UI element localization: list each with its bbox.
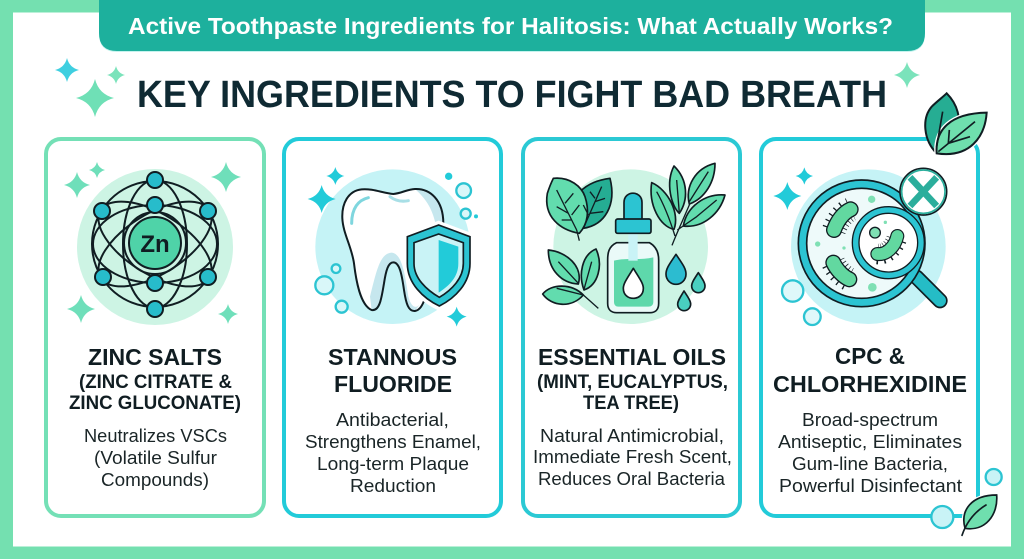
card outline: zinc [46,139,264,516]
icon: zinc atom: Zn [140,231,170,258]
heading: stannous fluoride: FLUORIDE [334,371,452,397]
heading: zinc salts: (ZINC CITRATE & [79,372,232,393]
panel: essential oils [523,139,740,516]
heading: essential oils [537,344,728,414]
heading: essential oils: (MINT, EUCALYPTUS, [537,372,728,393]
card outline: cpc [761,139,978,516]
card outline: oils [523,139,740,516]
heading: stannous fluoride [328,344,457,397]
description: zinc salts [84,425,227,490]
description: essential oils: Natural Antimicrobial, [540,425,724,446]
description: essential oils: Reduces Oral Bacteria [538,468,726,489]
heading: cpc and chlorhexidine: CPC & [835,343,905,369]
description: stannous fluoride: Long-term Plaque [317,453,469,474]
panel: cpc and chlorhexidine [761,139,978,516]
icon: zinc atom [64,162,241,325]
heading: zinc salts: ZINC SALTS [88,344,222,370]
description: stannous fluoride: Reduction [350,475,436,496]
header banner [99,0,925,52]
description: zinc salts: Neutralizes VSCs [84,425,227,446]
description: cpc and chlorhexidine: Antiseptic, Eliminates [778,431,962,452]
panel: stannous fluoride [284,139,501,516]
heading: zinc salts: ZINC GLUCONATE) [69,393,241,414]
description: stannous fluoride: Antibacterial, [336,409,449,430]
heading: cpc and chlorhexidine: CHLORHEXIDINE [773,371,967,397]
icon: magnifier and bacteria [773,167,947,325]
description: stannous fluoride: Strengthens Enamel, [305,431,481,452]
panel: zinc salts [46,139,264,516]
description: cpc and chlorhexidine: Gum-line Bacteria, [792,453,948,474]
description: zinc salts: Compounds) [101,469,209,490]
icon: tooth with shield [308,167,478,327]
heading: essential oils: TEA TREE) [583,393,679,414]
description: cpc and chlorhexidine: Powerful Disinfectant [779,475,962,496]
main title: KEY INGREDIENTS TO FIGHT BAD BREATH [137,74,887,116]
description: cpc and chlorhexidine: Broad-spectrum [802,409,938,430]
card outline: stannous [284,139,501,516]
heading: cpc and chlorhexidine [773,343,967,397]
heading: essential oils: ESSENTIAL OILS [538,344,726,370]
description: stannous fluoride [305,409,481,496]
heading: zinc salts [69,344,241,414]
description: essential oils [533,425,732,489]
icon: corner leaf and bubbles bottom right [931,469,1002,535]
heading: stannous fluoride: STANNOUS [328,344,457,370]
description: zinc salts: (Volatile Sulfur [94,447,217,468]
description: essential oils: Immediate Fresh Scent, [533,446,732,467]
decorative sparkles: title [55,58,920,117]
icon: oil bottle and leaves [543,163,725,324]
header banner: Active Toothpaste Ingredients for Halitosis: What Actually Works? [128,13,893,39]
description: cpc and chlorhexidine [778,409,962,496]
icon: corner leaves top right [925,93,987,154]
